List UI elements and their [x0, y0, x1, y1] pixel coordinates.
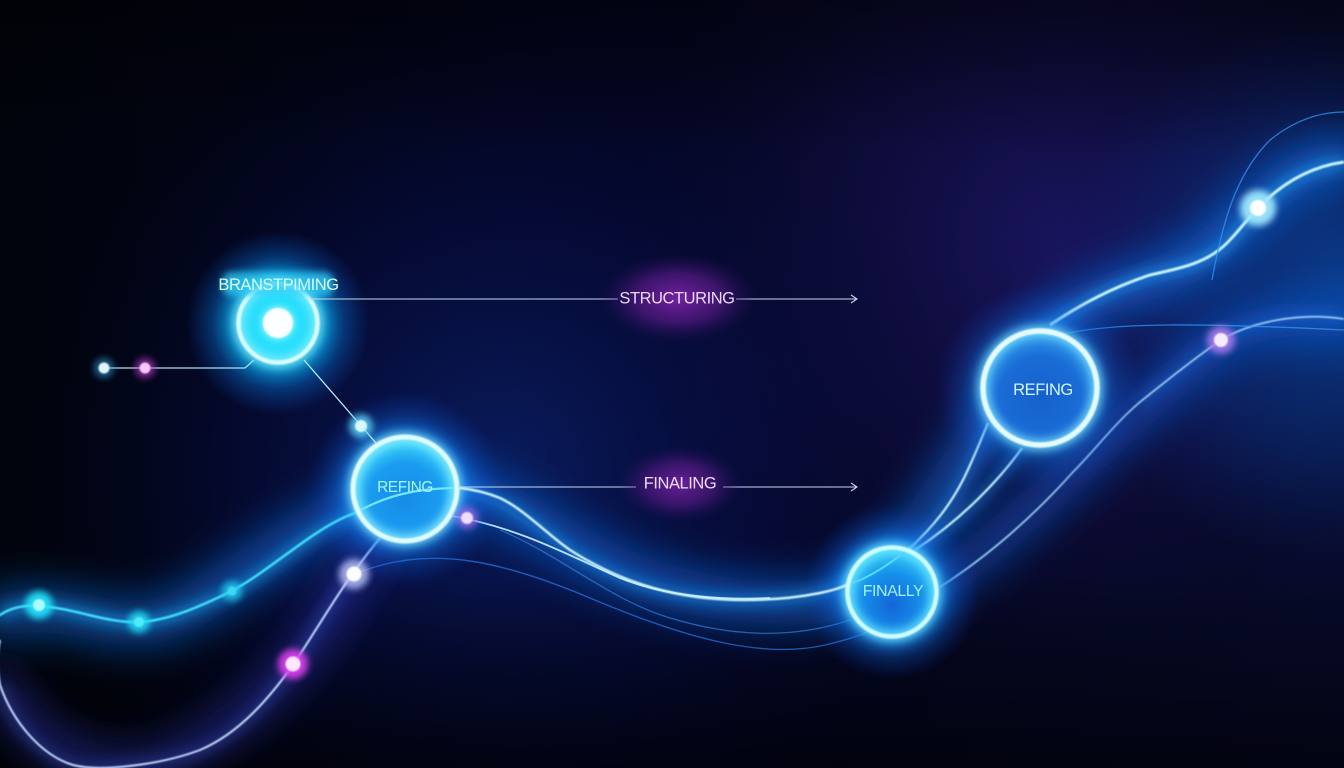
dot: lower link magenta	[278, 649, 308, 679]
label: finaling	[618, 446, 742, 522]
curve: main wave middle segment	[460, 488, 847, 600]
dot: wave cyan 3	[222, 581, 242, 601]
dot: lower link white	[339, 559, 369, 589]
dot: after refing	[456, 507, 478, 529]
connector: brainstorming to refing	[304, 360, 376, 443]
curve: wave through refing left	[355, 488, 460, 513]
label: finaling: FINALING	[644, 474, 716, 492]
curve: links from finally to refing	[908, 423, 1022, 550]
dot: connector	[349, 414, 373, 438]
label: finally: FINALLY	[863, 583, 924, 600]
glow of the flowing curves	[0, 160, 1344, 768]
dot: start white	[94, 358, 114, 378]
node: brainstorming	[186, 231, 370, 415]
curve: faint lower wave	[360, 558, 940, 650]
dot: start purple	[135, 358, 155, 378]
label: refing left: REFING	[377, 479, 433, 496]
dot: lower right	[1207, 326, 1235, 354]
curve: main wave left segment	[0, 513, 355, 622]
arrow: brainstorming to structuring	[310, 295, 857, 303]
label: structuring: STRUCTURING	[619, 290, 735, 308]
curve: faint upper arcs	[990, 112, 1344, 420]
curve: upper right line	[1050, 162, 1344, 325]
dot: upper right	[1240, 190, 1276, 226]
dot: wave cyan 2	[128, 611, 150, 633]
connector: start dots to brainstorming	[104, 360, 254, 368]
node: finally	[804, 504, 980, 680]
curve: lower right line	[940, 317, 1344, 587]
curve: lower left sweep	[0, 538, 380, 768]
label: structuring	[600, 254, 756, 342]
arrow: refing to finaling	[458, 483, 857, 491]
label: brainstorming: BRANSTPIMING	[218, 276, 339, 294]
curve: wave through finally	[847, 548, 910, 585]
label: refing right: REFING	[1013, 381, 1073, 399]
node: refing left	[307, 391, 503, 587]
curve: faint second wave	[500, 530, 850, 633]
dot: wave cyan 1	[25, 591, 53, 619]
node: refing right	[936, 284, 1144, 492]
curve: second strand from refing	[452, 516, 770, 599]
